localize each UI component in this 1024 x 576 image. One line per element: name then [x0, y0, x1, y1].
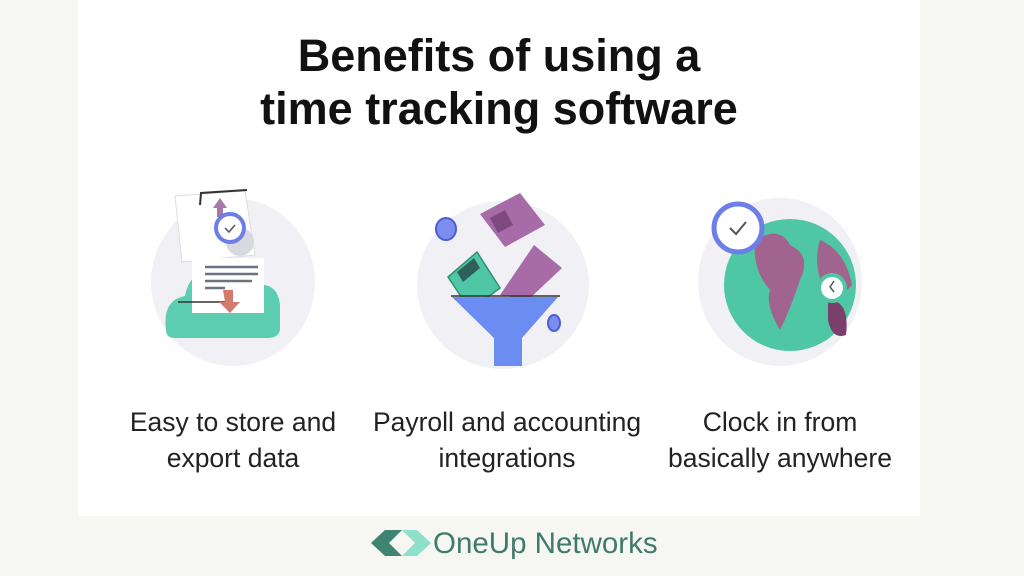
label: payroll: integrations — [438, 443, 576, 473]
label: clock in: Clock in from — [703, 407, 857, 437]
title: Benefits of using a — [298, 30, 700, 81]
title: time tracking software — [260, 83, 738, 134]
label: payroll: Payroll and accounting — [373, 407, 641, 437]
label: store data: export data — [167, 443, 299, 473]
white panel — [78, 0, 920, 516]
icon: cloud storage — [151, 190, 315, 366]
label: payroll — [373, 407, 641, 473]
label: store data — [130, 407, 336, 473]
icon: payroll funnel — [417, 193, 589, 369]
label: clock in: basically anywhere — [668, 443, 892, 473]
icon: globe with clocks — [698, 198, 862, 366]
label: clock in — [668, 407, 892, 473]
title — [260, 30, 738, 134]
label: store data: Easy to store and — [130, 407, 336, 437]
logo: OneUp Networks — [433, 527, 658, 560]
